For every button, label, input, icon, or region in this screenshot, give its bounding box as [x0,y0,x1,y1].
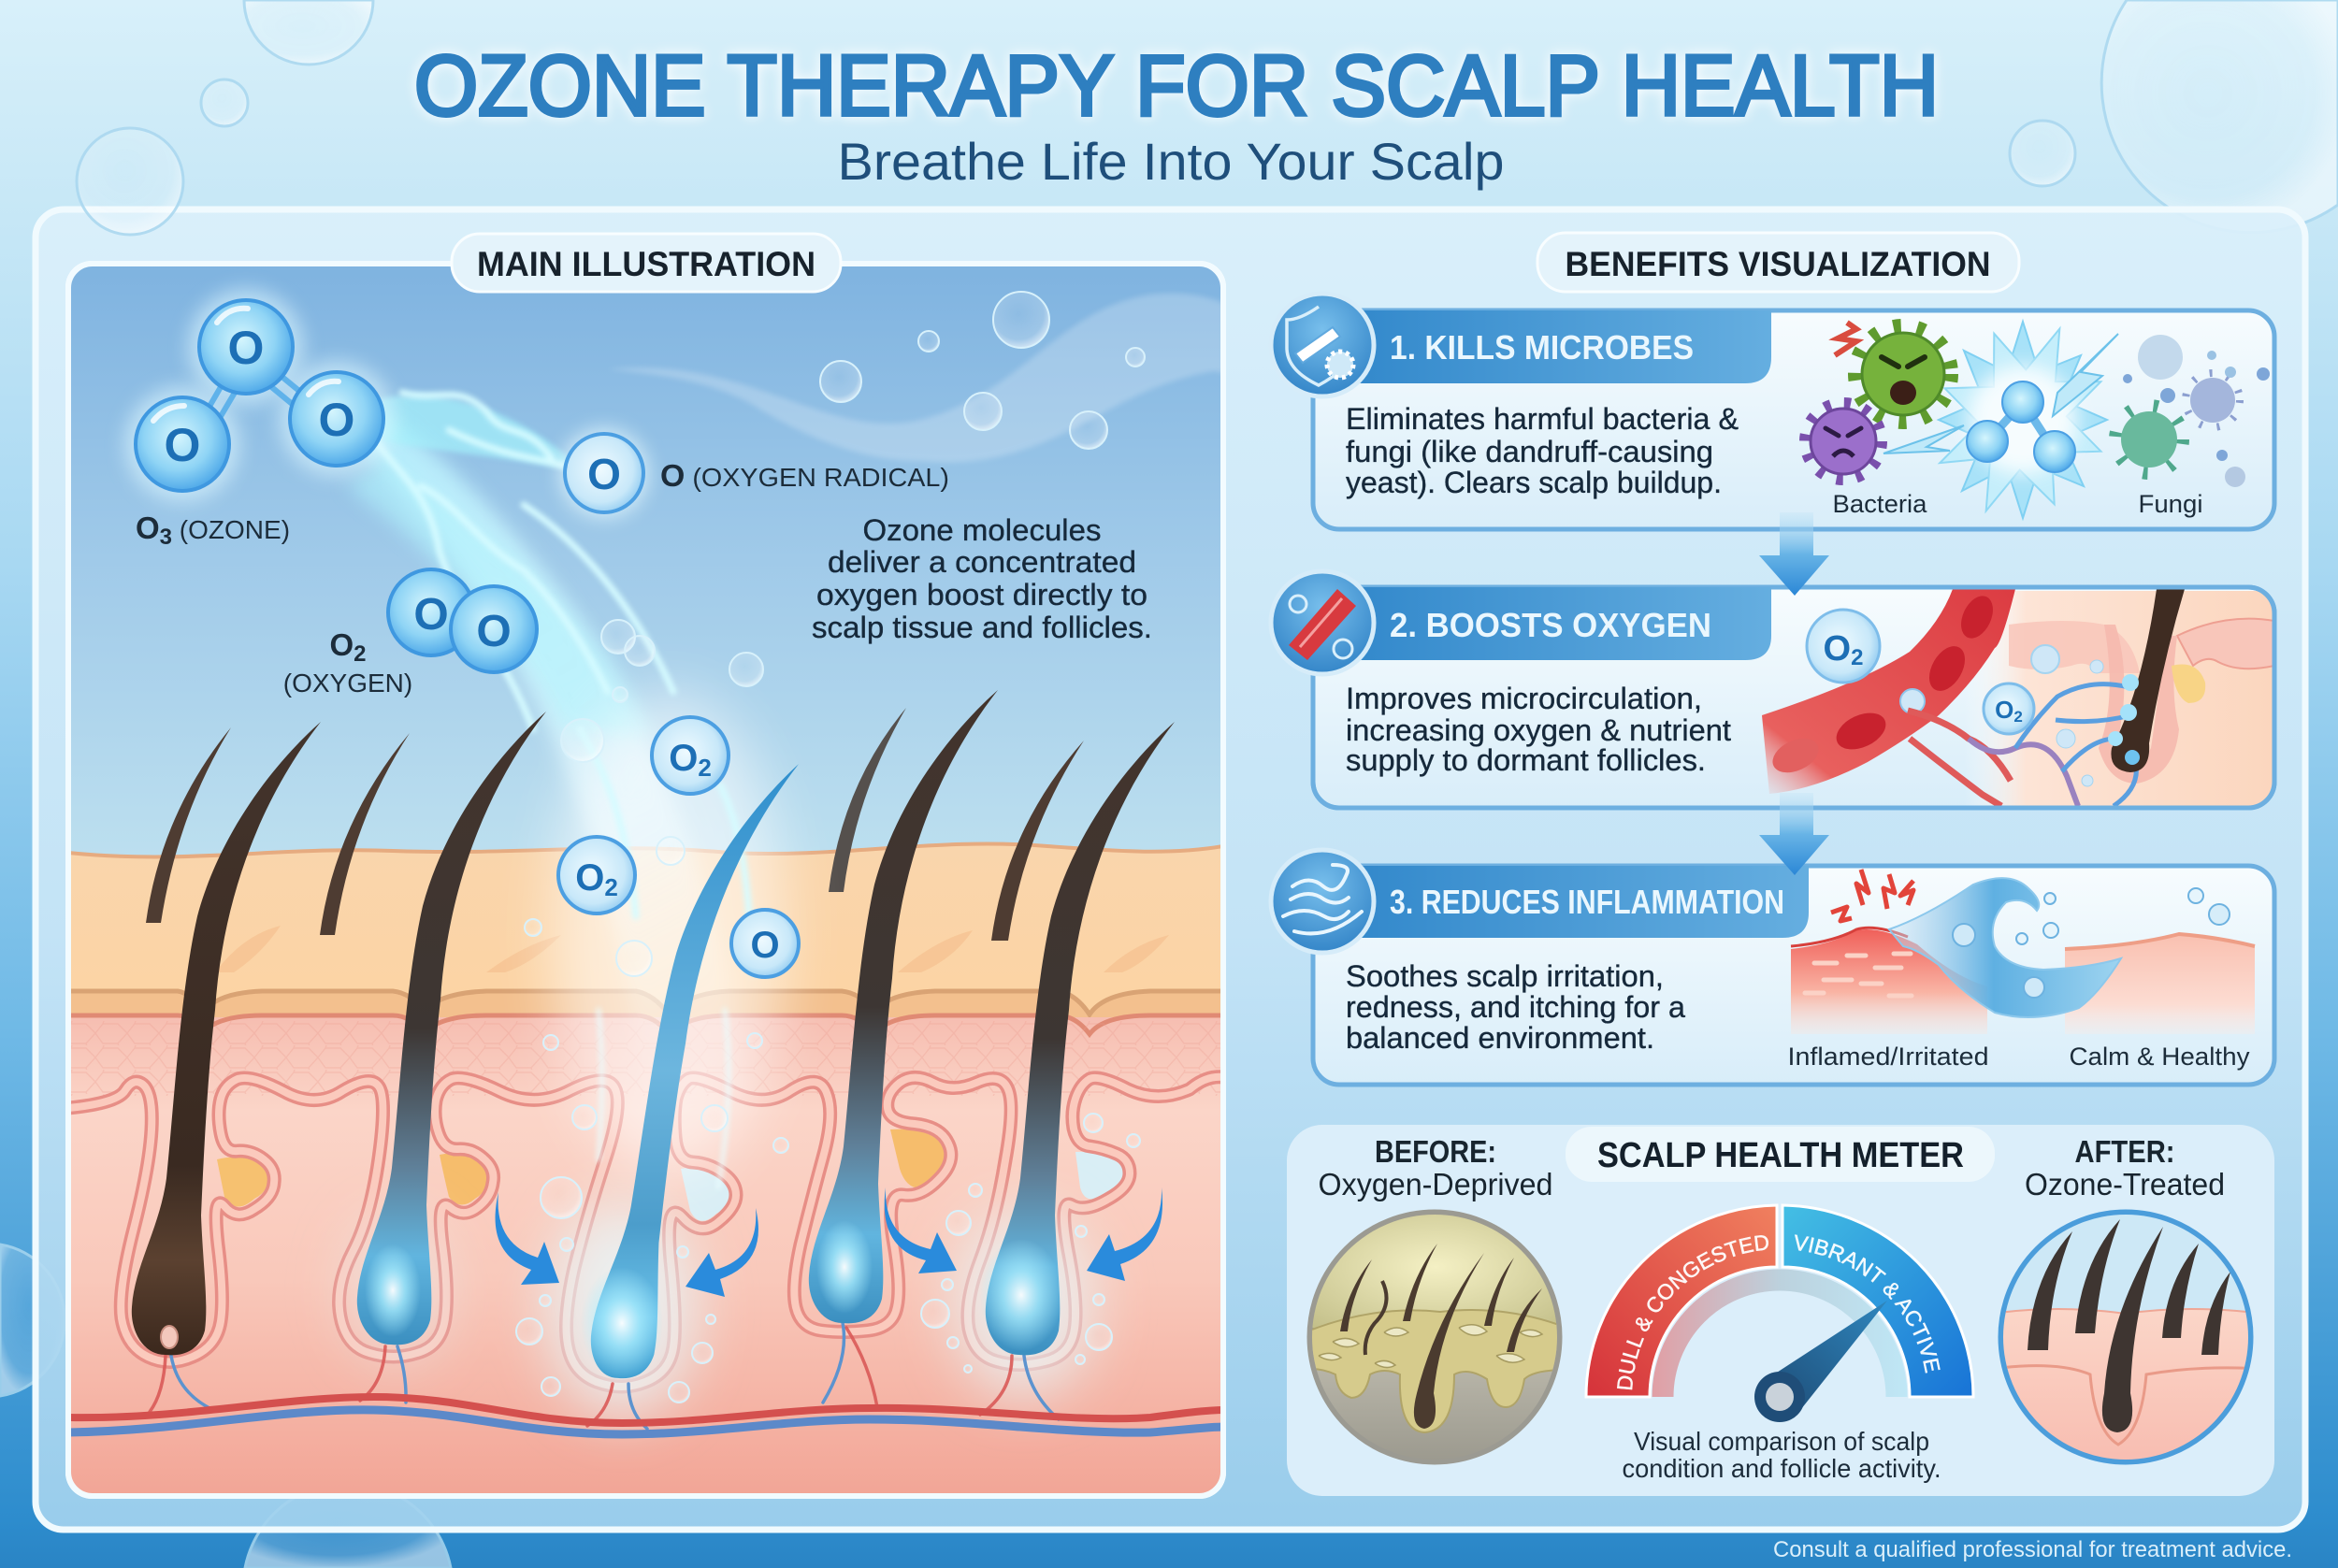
panel: main illustration [65,261,1226,1499]
molecule: O3 ozone [124,289,395,502]
molecule: O2 oxygen [388,569,537,672]
gauge: VIBRANT & ACTIVE [1794,1234,1941,1374]
O2 bubble: O [1995,696,2013,724]
O2 bubble [1807,610,1880,683]
arrow: card 1 to card 2 [1759,512,1829,596]
molecule: O3 ozone: O [165,419,200,471]
hair bulb glows [161,1220,1062,1379]
footer disclaimer: Consult a qualified professional for treatment advice. [1773,1537,2292,1562]
hair: small shafts [146,708,1084,941]
after label: AFTER: [2074,1134,2175,1169]
label: O3 ozone: (OZONE) [172,515,290,544]
icon: shield [1271,294,1374,396]
floating O radical [731,910,799,977]
floating O2 molecule: O [575,857,604,899]
label: O3 ozone: O [136,511,160,545]
soothing wave [1889,878,2230,1017]
arrow: card 2 to card 3 [1759,793,1829,875]
text: supply to dormant follicles. [1346,743,1706,777]
title: OZONE THERAPY FOR SCALP HEALTH [414,38,1939,134]
floating O2 molecule [652,717,729,794]
molecule: O2 oxygen: O [413,590,449,640]
label: inflamed: Inflamed/Irritated [1788,1043,1988,1071]
header bar [1322,310,1771,383]
panel: scalp health meter [1287,1125,2274,1496]
label: O2 oxygen: 2 [354,641,367,667]
floating O2 molecule: 2 [604,873,618,901]
molecule: O3 ozone: O [228,322,264,374]
inflamed skin [1791,928,1987,1034]
blue flow arrows [496,1187,1162,1297]
sky [68,264,1223,862]
heading: benefits visualization: BENEFITS VISUALIZATION [1566,245,1990,283]
card 1: kills microbes [1271,294,2274,542]
after label: Ozone-Treated [2025,1167,2225,1201]
O2 bubble: 2 [2013,708,2023,726]
text: Soothes scalp irritation, [1346,959,1664,993]
skin layers [68,843,1223,1496]
needle [1754,1301,1887,1422]
floating O2 molecule [558,837,635,913]
icon: irritation sparks [1831,870,1913,921]
molecule: O oxygen radical [559,428,649,518]
caption: Visual comparison of scalp [1634,1427,1929,1456]
heading: 1. KILLS MICROBES [1390,328,1694,367]
card 3: reduces inflammation [1271,850,2274,1085]
header bar [1322,866,1809,938]
card 2: boosts oxygen [1271,571,2274,808]
gauge [1584,1204,1975,1422]
text: Improves microcirculation, [1346,682,1702,715]
icon: waves and hand [1271,850,1374,953]
molecule: O3 ozone: O [319,394,354,446]
artwork: vessel and follicle [1762,589,2274,806]
card 2 outline [1313,587,2274,808]
ozone burst [1883,297,2138,542]
bulb auras [346,1201,1094,1417]
before circle [1305,1206,1566,1477]
label: bacteria: Bacteria [1833,490,1927,518]
ozone stream [346,393,786,1178]
light streaks over central hair [599,1010,729,1187]
before label: Oxygen-Deprived [1319,1167,1552,1201]
label: O2 oxygen: O [329,627,354,662]
heading: benefits visualization [1537,233,2019,292]
caption: condition and follicle activity. [1622,1454,1941,1483]
icon: blood vessel [1271,571,1374,674]
heading: main illustration: MAIN ILLUSTRATION [477,245,815,283]
header bar [1322,587,1771,660]
molecule: O2 oxygen: O [476,607,512,656]
label: O3 ozone: 3 [160,525,172,550]
text: fungi (like dandruff-causing [1346,435,1713,468]
bubbles [516,292,1145,1403]
O2 bubble: 2 [1851,645,1863,670]
air wave [608,294,1225,463]
floating O2 molecule: O [669,738,698,779]
label: O2 oxygen: (OXYGEN) [283,669,412,698]
text: redness, and itching for a [1346,990,1685,1024]
description: scalp tissue and follicles. [812,611,1152,644]
heading: 2. BOOSTS OXYGEN [1390,606,1711,644]
subtitle: Breathe Life Into Your Scalp [838,132,1504,191]
floating O radical: O [750,925,780,966]
heading: main illustration [452,234,841,292]
bacteria [1806,323,1950,479]
sebaceous glands [217,1129,1126,1221]
heading [1566,1127,1995,1182]
label: calm: Calm & Healthy [2069,1043,2250,1071]
label: O oxygen radical: O (OXYGEN RADICAL) [660,458,949,493]
follicle sheaths [68,1077,1223,1387]
text: Eliminates harmful bacteria & [1346,402,1739,436]
description: Ozone molecules [862,513,1102,547]
heading: 3. REDUCES INFLAMMATION [1390,883,1784,921]
description: deliver a concentrated [828,545,1136,579]
molecule: O oxygen radical: O [587,450,621,498]
description: oxygen boost directly to [816,578,1147,611]
heading: SCALP HEALTH METER [1597,1136,1964,1175]
text: increasing oxygen & nutrient [1346,713,1731,747]
text: balanced environment. [1346,1021,1654,1055]
text: yeast). Clears scalp buildup. [1346,466,1722,499]
floating O2 molecule: 2 [698,754,712,782]
decorative bubble overlapping frame [77,128,183,235]
large hairs [132,722,321,1355]
O2 bubble: O [1824,629,1851,669]
blood vessels [68,1318,1225,1434]
fungi [2115,335,2270,487]
before label: BEFORE: [1375,1134,1496,1169]
calm skin [2065,934,2255,1034]
O2 bubble [1984,683,2034,734]
gauge: DULL & CONGESTED [1617,1235,1768,1389]
after circle [1992,1206,2263,1468]
label: fungi: Fungi [2138,490,2203,518]
